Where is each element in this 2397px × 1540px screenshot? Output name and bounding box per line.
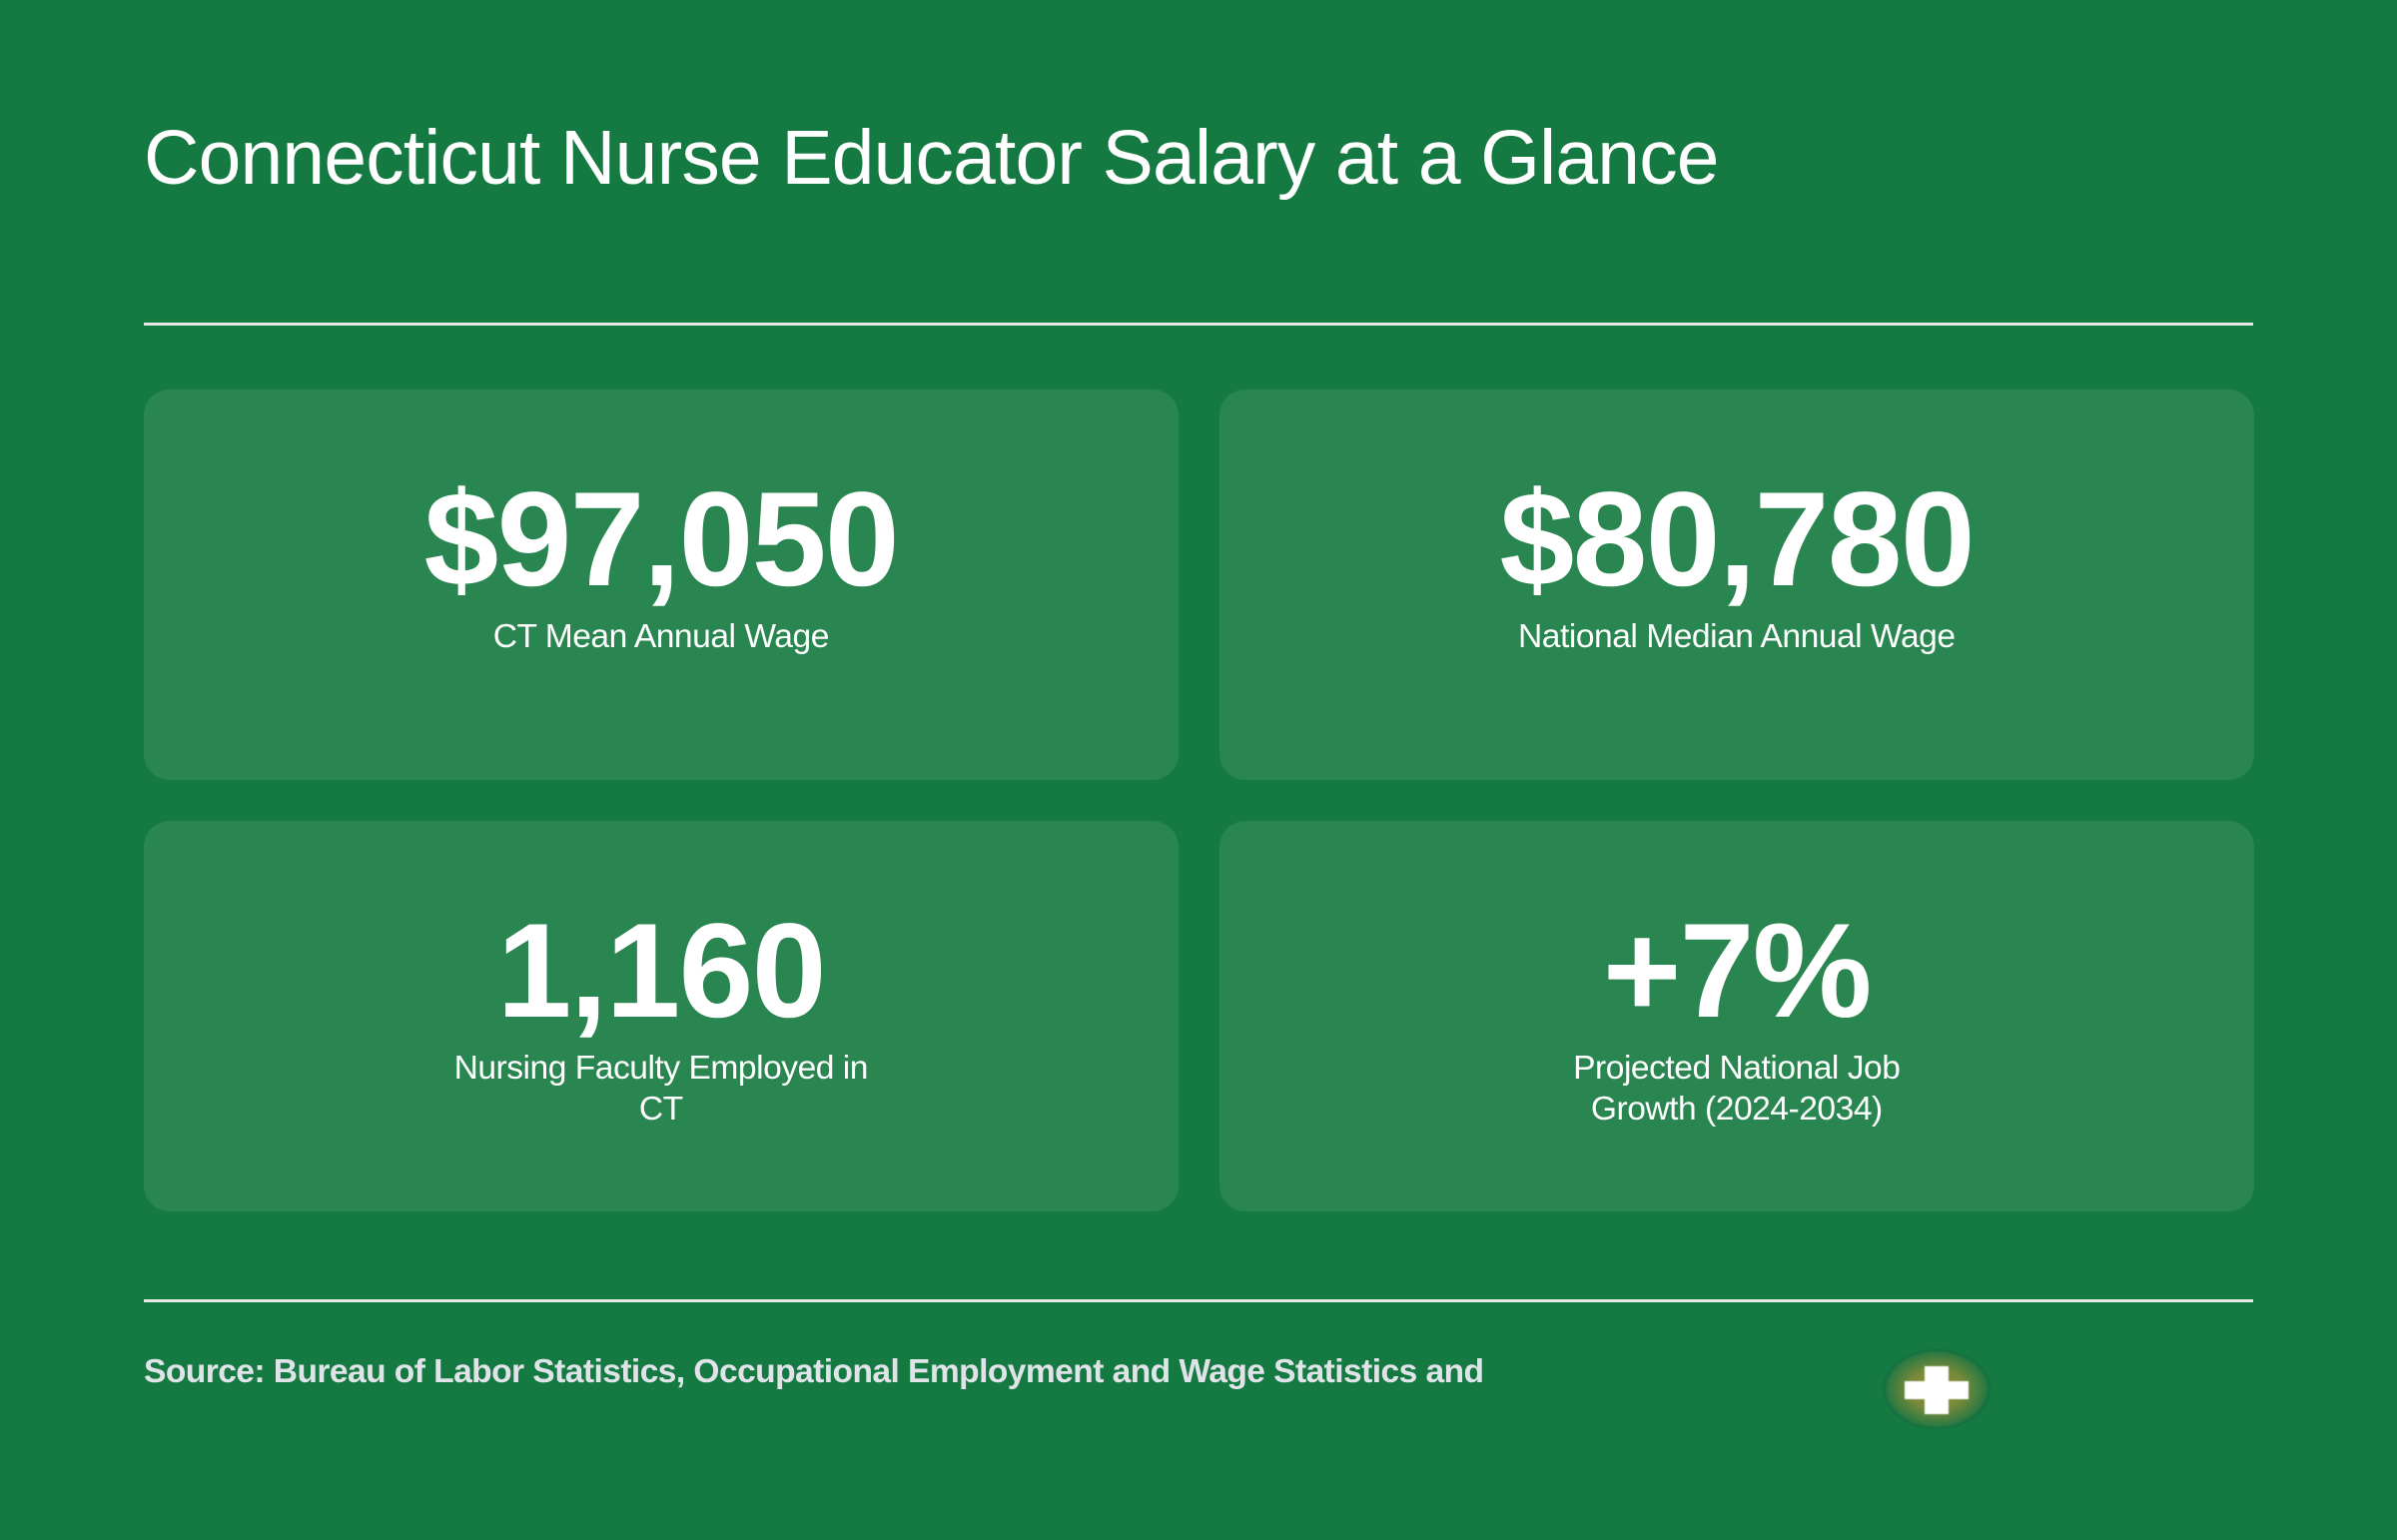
label: CT Mean Annual Wage: CT Mean Annual Wage xyxy=(493,618,829,655)
icon: medical cross logo xyxy=(1884,1350,1990,1428)
stat: +7%: +7% xyxy=(1603,896,1871,1046)
label: National Median Annual Wage: National Median Annual Wage xyxy=(1518,618,1956,655)
label: Nursing Faculty Employed in CT: CT xyxy=(639,1091,683,1128)
label: Projected National Job Growth xyxy=(1573,1050,1900,1128)
stat: $97,050: $97,050 xyxy=(424,464,898,614)
label: Projected National Job Growth: Growth (2024-2034) xyxy=(1591,1091,1883,1128)
panel: nursing faculty employed xyxy=(144,821,1179,1211)
label: Nursing Faculty Employed in CT xyxy=(454,1050,868,1128)
panel: CT mean annual wage xyxy=(144,389,1179,780)
panel: projected job growth xyxy=(1219,821,2254,1211)
panel: national median annual wage xyxy=(1219,389,2254,780)
stat: 1,160: 1,160 xyxy=(497,896,825,1046)
label: Nursing Faculty Employed in CT: Nursing Faculty Employed in xyxy=(454,1050,868,1087)
source note: Source: Bureau of Labor Statistics, Occupational Employment and Wage Statistics and xyxy=(144,1353,1483,1390)
label: Projected National Job Growth: Projected National Job xyxy=(1573,1050,1900,1087)
stat: $80,780: $80,780 xyxy=(1500,464,1974,614)
title: Connecticut Nurse Educator Salary at a Glance xyxy=(144,115,1719,201)
